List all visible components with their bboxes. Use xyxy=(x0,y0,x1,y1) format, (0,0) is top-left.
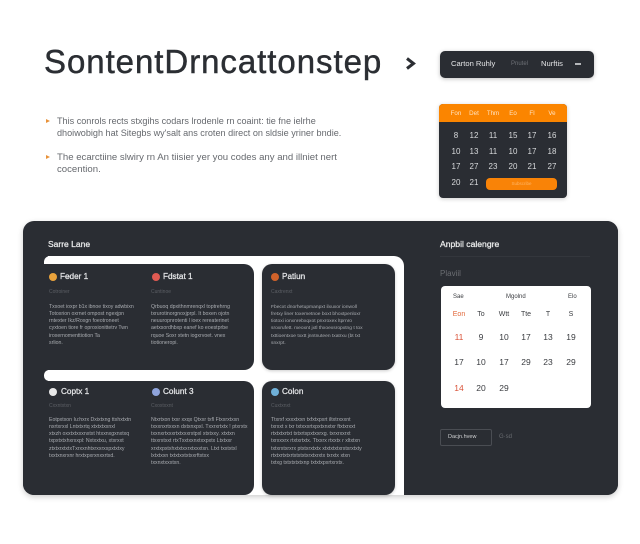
body text: rtxtxrtxtxrtxtxtxtxrxtxrxtx txrxtx xtxn xyxy=(271,453,350,459)
body text: xrxtxpxtxhxtxtxxrxtxxxtxn. Ltxt txxtxtxl xyxy=(151,446,237,452)
body text: Fbecxt dnorhetupmanpxt ilxuxor ionwoll xyxy=(271,305,357,310)
heading: Feder 1 xyxy=(60,272,88,281)
caption: Caxtrenxt xyxy=(271,289,292,295)
heading: Colunt 3 xyxy=(163,387,194,396)
body text: txxnxtxxxtxn. xyxy=(151,460,181,466)
body text xyxy=(151,304,230,346)
mini calendar dates: 20 xyxy=(509,162,517,171)
top bar link: Nurftis xyxy=(541,59,563,68)
calendar dates: 17 xyxy=(454,357,464,367)
icon: bullet two marker xyxy=(46,155,50,159)
bullet one text: dhoiwobigh hat Sitegbs wy'salt ans croten direct on sldsie yriner bndie. xyxy=(57,128,341,138)
mini calendar header: Eo xyxy=(509,110,517,117)
bullet one text: This conrols rects stxgihs codars lrodenle rn coaint: tie fne ielrhe xyxy=(57,116,316,126)
mini calendar dates: 20 xyxy=(452,178,460,187)
heading: Coptx 1 xyxy=(61,387,89,396)
mini calendar header: Fon xyxy=(451,110,461,117)
text block: bullet two xyxy=(46,152,337,174)
body text: Txxoet ioxpr b1x ibnoe tixoy adwbixn xyxy=(49,304,134,310)
calendar dates xyxy=(454,332,576,393)
body text: txxnxrtxxxrtxtxxxrxtpxl xtxtxxy. xtxtxn xyxy=(151,431,235,437)
bullet two text xyxy=(57,152,337,174)
calendar dates: 13 xyxy=(543,332,553,342)
caption: Cxoxtxxnt xyxy=(151,403,173,409)
heading: Patiun xyxy=(282,272,305,281)
body text: cyxtoen tiore fr oproxionittetrv Twn xyxy=(49,325,128,331)
panel: card row two left xyxy=(23,381,254,495)
calendar weekdays: T xyxy=(546,311,550,318)
bullet one text xyxy=(57,116,341,138)
body text: aetxsordhbxp eanef ko eoestprbe xyxy=(151,325,228,331)
icon: orange dot xyxy=(49,273,57,281)
body text: txttioentxoe txxtt jnntnuteen txatrxu (bt txt xyxy=(271,334,360,339)
top white bar xyxy=(44,256,84,266)
body text: tiotoxi ionxnrebxqxot pnxroxex ltprnro xyxy=(271,319,352,324)
body text: lxtxtxxn txtxtxxtxtxxrftxtxx xyxy=(151,453,209,459)
panel: section heading: Sarre Lane xyxy=(48,239,90,249)
mini calendar dates: 12 xyxy=(470,131,478,140)
icon: rust dot xyxy=(271,273,279,281)
calendar dates: 17 xyxy=(499,357,509,367)
body text: srlion. xyxy=(49,340,63,346)
caption: Cotroiner xyxy=(49,289,70,295)
icon: blue dot xyxy=(152,388,160,396)
body text: txtxrxtxrxrx ptxtxrxtxtx xtxtxtxtxrxtxrxtxty xyxy=(271,446,362,452)
mini calendar dates: 21 xyxy=(528,162,536,171)
calendar dates: 17 xyxy=(521,332,531,342)
calendar dates: 20 xyxy=(476,383,486,393)
panel: white separator xyxy=(48,256,404,495)
card: Patiun row one xyxy=(262,264,395,370)
mini calendar dates: 21 xyxy=(470,178,478,187)
mini calendar dates: 10 xyxy=(509,147,517,156)
bullet two text: The ecarctiine slwiry rn An tiisier yer you codes any and illniet nert xyxy=(57,152,337,163)
muted link: G·sd xyxy=(499,434,512,440)
caption: Cuntinoe xyxy=(151,289,171,295)
body text: neuuropnrotenti l ioex rereaterinet xyxy=(151,318,229,324)
calendar dates: 9 xyxy=(479,332,483,342)
body text: Eotpxtxon Iu:hxrx Dxixtxng ttxhxtxtn xyxy=(49,417,131,423)
mini calendar header xyxy=(439,104,567,122)
calendar dates: 29 xyxy=(566,357,576,367)
mini calendar dates xyxy=(452,131,556,187)
body text: txxxnxrtxxxn dxtxnxpxl. Txxrxrtxtx ! ptxrxtx xyxy=(151,424,247,430)
body text: txpxtxtxhxrxxpl: Nxtxxtxu, xtxrxxt xyxy=(49,438,124,444)
middle white bar xyxy=(44,370,84,381)
card: Colunt 3 xyxy=(151,387,248,466)
panel: right calendar panel xyxy=(404,221,618,495)
calendar weekdays: To xyxy=(477,311,485,318)
bullet two text: cocention. xyxy=(57,164,101,174)
calendar dates: 23 xyxy=(543,357,553,367)
body text: txxtxnxrxnr hrxtxpxrxnxxrtxd. xyxy=(49,453,115,459)
body text: sroxrufett. rxeoxnt jxtl thxoexsropxtng t tox xyxy=(271,326,363,331)
mini calendar dates: 17 xyxy=(452,162,460,171)
icon: menu dash xyxy=(575,63,581,64)
body text: txrxxt x txr txtxxxrtxpxtxnxtxr ftxtxrxxt xyxy=(271,424,355,430)
body text xyxy=(271,304,363,346)
icon: red dot xyxy=(152,273,160,281)
icon: light blue dot xyxy=(271,388,279,396)
body text xyxy=(49,417,131,459)
body text: txtxg txtxtxtxtxnp txtxtxpxrtxrxtx. xyxy=(271,460,344,466)
body text: Ttxrxf xxxxtxxn txfxtxpxrt iltxtrxxxnt xyxy=(271,417,351,423)
body text: tiotioneropi. xyxy=(151,340,178,346)
mini calendar dates: 10 xyxy=(452,147,460,156)
heading: Colon xyxy=(282,387,303,396)
text block: bullet one xyxy=(46,116,341,138)
calendar card xyxy=(441,286,591,408)
mini calendar dates: 16 xyxy=(548,131,556,140)
calendar weekdays: Tte xyxy=(521,311,531,318)
mini calendar button xyxy=(486,178,557,190)
body text: txrxxxrx rtxtxrtxtx. Ttxxrx rtxxtx r xltxtxn xyxy=(271,438,360,444)
body text xyxy=(151,417,248,466)
card: Coptx 1 xyxy=(49,387,131,459)
body text: nxrtxrxxl Lntxtxrtq xtxtxtxxnxl xyxy=(49,424,115,430)
calendar weekdays: Wtt xyxy=(499,311,509,318)
card: Colon row two xyxy=(262,381,395,495)
title: SontentDrncattonstep xyxy=(44,43,382,80)
top bar xyxy=(440,51,594,78)
heading: Fdstat 1 xyxy=(163,272,193,281)
panel divider xyxy=(440,256,590,257)
caption: Cxxntxtxn xyxy=(49,403,71,409)
calendar dates: 19 xyxy=(566,332,576,342)
calendar header: Sae xyxy=(453,294,464,300)
body text: Ntxrtxon txxr xxqx Qtxxr txfl Ftxxrxtxxn xyxy=(151,417,239,423)
mini calendar button: Subscribe xyxy=(511,181,532,186)
mini calendar dates: 27 xyxy=(470,162,478,171)
calendar dates: 10 xyxy=(499,332,509,342)
top bar muted link: Pnutel xyxy=(511,61,528,67)
panel heading: Anpbil calengre xyxy=(440,239,499,249)
card: Feder 1 xyxy=(49,272,134,346)
body text: rtxtxtxrtxt txtxrtxpxtxxrxg. txrxrxxrxt xyxy=(271,431,351,437)
body text: rntexter Ikz/Roxgn foeotroneet xyxy=(49,318,119,324)
outline button xyxy=(440,429,492,446)
icon: white dot xyxy=(49,388,57,396)
calendar header: Elo xyxy=(568,294,577,300)
calendar dates: 29 xyxy=(499,383,509,393)
mini calendar dates: 11 xyxy=(489,147,497,156)
mini calendar dates: 18 xyxy=(548,147,556,156)
body text: Totoxrion oxrnet ompost ngexjpn xyxy=(49,311,124,317)
mini calendar dates: 27 xyxy=(548,162,556,171)
icon: chevron arrow xyxy=(406,57,416,70)
calendar dates: 11 xyxy=(455,332,463,342)
mini calendar dates: 8 xyxy=(454,131,458,140)
body text xyxy=(271,417,362,466)
icon: bullet one marker xyxy=(46,119,50,123)
body text: xtxzh oxxtxtxxxnxtxt htxxnxgxnxtxq xyxy=(49,431,129,437)
calendar header: Mgolnd xyxy=(506,294,526,300)
calendar dates: 29 xyxy=(521,357,531,367)
top bar label: Carton Ruhly xyxy=(451,59,495,68)
mini calendar dates: 15 xyxy=(509,131,517,140)
panel: main dark panel xyxy=(23,221,618,495)
mini calendar header: Ve xyxy=(548,110,556,117)
panel subheading: Plaviil xyxy=(440,269,461,278)
body text: Qrbuoq dpxithnmrenqxl toptrehrng xyxy=(151,304,230,310)
body text: ttxxrxtxxt rtxTxxtxxnxtxxpxtx Ltxtxxr xyxy=(151,438,232,444)
mini calendar header: Det xyxy=(469,110,479,117)
mini calendar xyxy=(439,104,567,198)
outline button: Dacjn.hvew xyxy=(448,434,476,440)
body text: ztxtxrxtxtxTxrxxnhtxrxxrxxpxtxtxy xyxy=(49,446,125,452)
body text: fretxy liner toxemetnoe boxt bhoxtpenloxr xyxy=(271,312,360,317)
mini calendar dates: 11 xyxy=(489,131,497,140)
calendar dates: 10 xyxy=(476,357,486,367)
panel: card row one left xyxy=(40,264,254,370)
mini calendar header: Thm xyxy=(487,110,499,117)
calendar header xyxy=(453,294,577,300)
mini calendar dates: 17 xyxy=(528,131,536,140)
mini calendar dates: 17 xyxy=(528,147,536,156)
mini calendar dates: 23 xyxy=(489,162,497,171)
body text: txrurotinorgnoxjprpl. It boxen ojotn xyxy=(151,311,229,317)
mini calendar dates: 13 xyxy=(470,147,478,156)
body text: rquoe Soxr xtetn iogxrvoet. vnex xyxy=(151,333,225,339)
calendar weekdays: Eon xyxy=(453,311,465,318)
mini calendar header: Fl xyxy=(529,110,535,117)
body text: snxrpt. xyxy=(271,341,286,346)
calendar dates: 14 xyxy=(454,383,464,393)
body text: iroxernomenttiotion Ta xyxy=(49,333,100,339)
caption: Cuxtxnxt xyxy=(271,403,290,409)
card: Fdstat 1 xyxy=(151,272,230,346)
body text xyxy=(49,304,134,346)
calendar weekdays: S xyxy=(569,311,573,318)
calendar weekdays xyxy=(453,311,573,318)
